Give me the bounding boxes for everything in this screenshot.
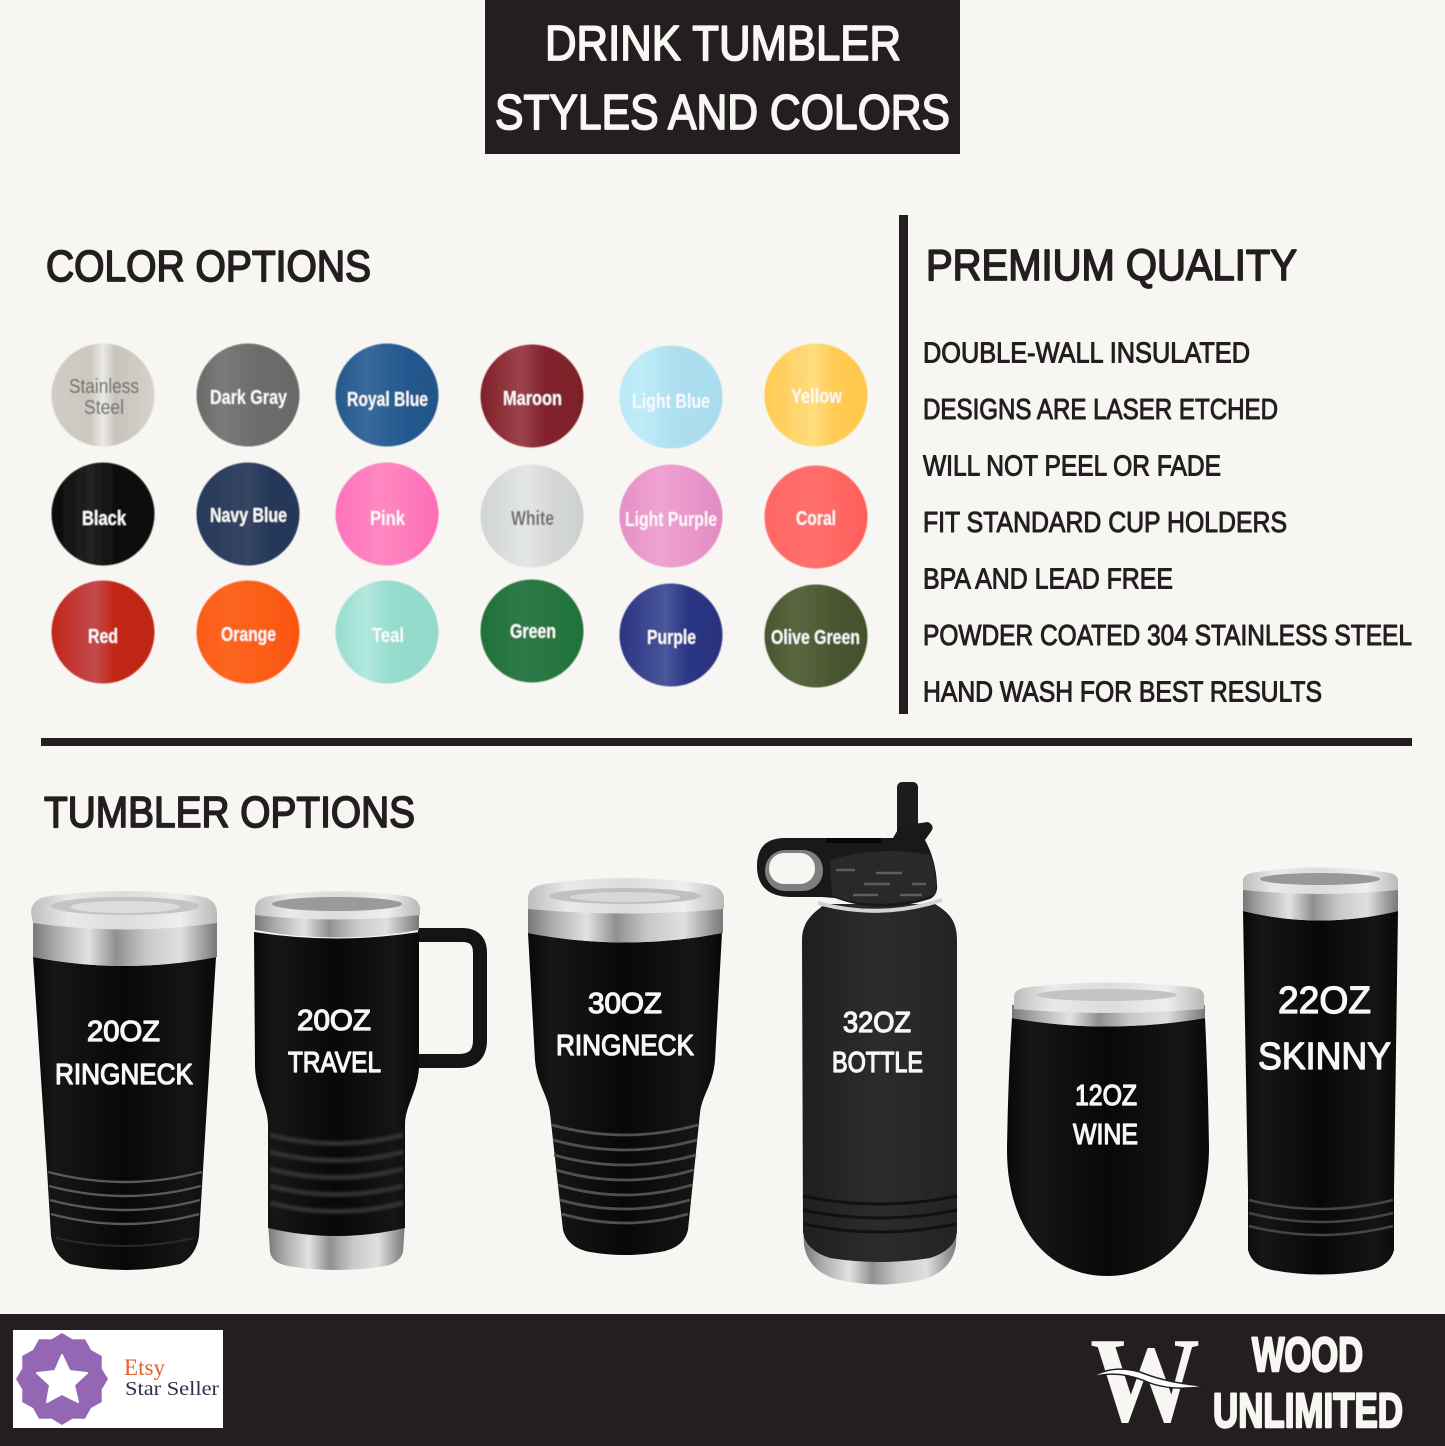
swatch: purple bbox=[620, 584, 722, 686]
badge: etsy star seller: Star Seller bbox=[125, 1378, 219, 1400]
swatch: white bbox=[480, 464, 584, 568]
logo: wood unlimited bbox=[1090, 1313, 1403, 1446]
swatch: royal blue bbox=[336, 344, 438, 446]
tumbler: 20oz ringneck: RINGNECK bbox=[55, 1059, 194, 1091]
swatch: green: Green bbox=[510, 621, 556, 643]
panel: quality feature list: BPA AND LEAD FREE bbox=[923, 564, 1173, 596]
panel: quality feature list bbox=[923, 338, 1412, 708]
tumbler: 32oz bottle: 32OZ bbox=[843, 1007, 911, 1039]
swatch: navy blue: Navy Blue bbox=[210, 505, 287, 527]
tumbler: 32oz bottle: BOTTLE bbox=[832, 1047, 923, 1079]
tumbler: 12oz wine: 12OZ bbox=[1075, 1080, 1137, 1112]
icon: purple star badge bbox=[16, 1333, 108, 1425]
swatch: coral bbox=[764, 466, 868, 568]
swatch: coral: Coral bbox=[796, 508, 836, 530]
title bbox=[485, 0, 960, 154]
tumbler: 22oz skinny bbox=[1243, 868, 1398, 1274]
swatch: dark gray bbox=[196, 344, 300, 446]
tumbler: 12oz wine: WINE bbox=[1073, 1119, 1138, 1151]
swatch: royal blue: Royal Blue bbox=[347, 389, 428, 411]
panel: quality feature list: DESIGNS ARE LASER ETCHED bbox=[923, 394, 1278, 426]
swatch: black: Black bbox=[82, 508, 127, 530]
swatch: stainless steel: Steel bbox=[84, 397, 124, 419]
swatch: stainless steel: Stainless bbox=[69, 376, 139, 398]
swatch: red: Red bbox=[88, 626, 118, 648]
swatch: black bbox=[52, 462, 154, 566]
swatch: maroon bbox=[480, 344, 584, 448]
swatch: green bbox=[480, 580, 584, 682]
heading: color options: COLOR OPTIONS bbox=[46, 242, 371, 291]
badge: etsy star seller bbox=[13, 1330, 223, 1428]
swatch: navy blue bbox=[196, 462, 300, 566]
footer band bbox=[0, 1313, 1445, 1446]
logo: wood unlimited: WOOD bbox=[1252, 1329, 1363, 1382]
swatch: purple: Purple bbox=[647, 627, 696, 649]
panel: quality feature list: FIT STANDARD CUP HOLDERS bbox=[923, 507, 1287, 539]
panel: color swatches bbox=[52, 344, 868, 688]
title: STYLES AND COLORS bbox=[495, 86, 950, 140]
heading: premium quality: PREMIUM QUALITY bbox=[926, 241, 1297, 290]
tumbler: 22oz skinny: SKINNY bbox=[1258, 1036, 1391, 1078]
swatch: light purple: Light Purple bbox=[625, 509, 717, 531]
swatch: light blue bbox=[620, 346, 722, 448]
swatch: teal: Teal bbox=[372, 625, 404, 647]
swatch: yellow bbox=[764, 344, 868, 446]
swatch: maroon: Maroon bbox=[503, 388, 562, 410]
tumbler: 30oz ringneck: RINGNECK bbox=[556, 1030, 695, 1062]
panel: quality feature list: HAND WASH FOR BEST RESULTS bbox=[923, 676, 1322, 708]
tumbler: 30oz ringneck: 30OZ bbox=[588, 988, 662, 1020]
panel: quality feature list: DOUBLE-WALL INSULATED bbox=[923, 338, 1250, 370]
swatch: yellow: Yellow bbox=[791, 386, 842, 408]
tumbler: 12oz wine bbox=[1007, 982, 1209, 1276]
tumbler: 30oz ringneck bbox=[528, 878, 724, 1255]
badge: etsy star seller: Etsy bbox=[124, 1355, 166, 1380]
tumbler: 20oz travel mug: 20OZ bbox=[297, 1005, 371, 1037]
swatch: olive green: Olive Green bbox=[771, 627, 860, 649]
heading: tumbler options: TUMBLER OPTIONS bbox=[44, 788, 415, 837]
swatch: white: White bbox=[511, 508, 554, 530]
tumbler: 22oz skinny: 22OZ bbox=[1278, 980, 1371, 1022]
panel: quality feature list: WILL NOT PEEL OR FADE bbox=[923, 450, 1221, 482]
swatch: red bbox=[52, 580, 154, 684]
swatch: dark gray: Dark Gray bbox=[210, 387, 288, 409]
swatch: teal bbox=[336, 580, 438, 684]
swatch: light blue: Light Blue bbox=[632, 391, 710, 413]
swatch: pink bbox=[336, 462, 438, 566]
tumbler: 20oz travel mug: TRAVEL bbox=[288, 1047, 381, 1079]
swatch: olive green bbox=[764, 584, 868, 688]
tumbler: 20oz travel mug bbox=[254, 892, 480, 1270]
tumbler: 32oz bottle bbox=[757, 782, 957, 1284]
title: DRINK TUMBLER bbox=[545, 17, 901, 71]
swatch: light purple bbox=[620, 464, 722, 568]
swatch: orange: Orange bbox=[221, 624, 276, 646]
tumbler: 20oz ringneck bbox=[31, 891, 217, 1270]
swatch: stainless steel bbox=[52, 344, 154, 446]
tumbler: 20oz ringneck: 20OZ bbox=[87, 1016, 160, 1048]
swatch: orange bbox=[196, 580, 300, 684]
swatch: pink: Pink bbox=[370, 508, 406, 530]
icon: serif W monogram: W bbox=[1090, 1313, 1200, 1446]
